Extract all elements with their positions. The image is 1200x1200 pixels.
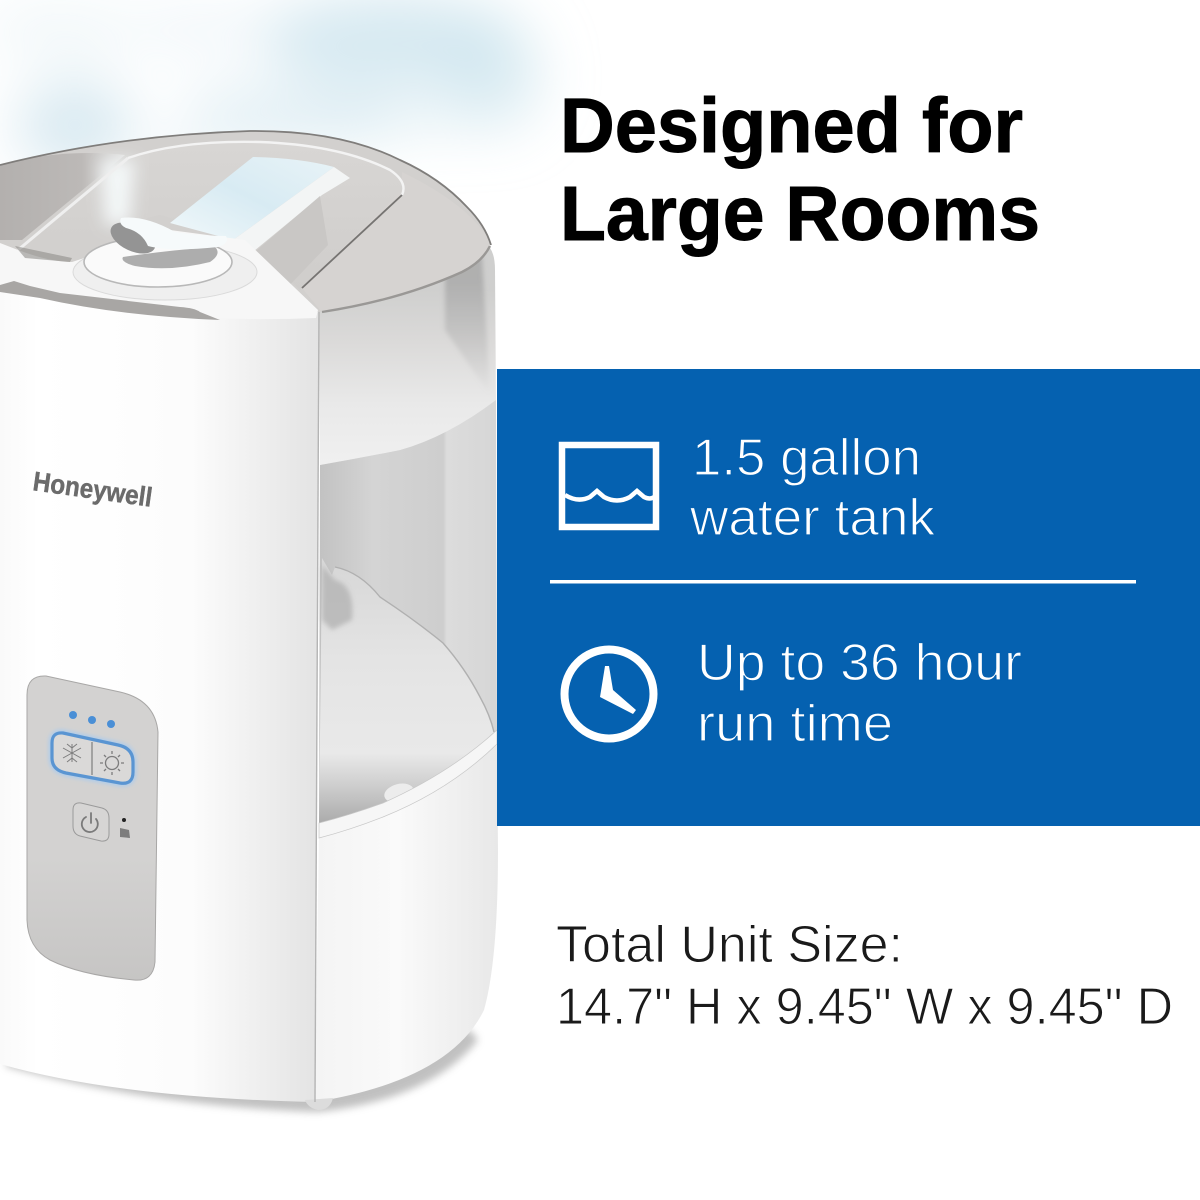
- tank reflection strip: [444, 258, 488, 373]
- feature text: water tank: [689, 429, 936, 547]
- nozzle collar: [84, 237, 232, 287]
- indicator dot: [122, 818, 126, 822]
- icon: refill: [120, 828, 130, 838]
- icon: snowflake: [63, 744, 81, 762]
- nozzle dial: [106, 216, 160, 260]
- white top deck: [0, 230, 318, 319]
- feature text: water tank: 1.5 gallon: [692, 429, 921, 487]
- base shell: [315, 735, 498, 1102]
- glass highlight: [128, 142, 404, 195]
- feature text: run time: run time: [697, 695, 893, 753]
- divider: [550, 580, 1136, 584]
- vent slot: [0, 281, 220, 320]
- base ledge: [319, 730, 497, 838]
- deck notch: [15, 246, 72, 262]
- inner bowl: [319, 558, 494, 823]
- feature text: water tank: water tank: [689, 489, 936, 547]
- button divider: [91, 742, 93, 775]
- title: Large Rooms: [560, 171, 1040, 257]
- blue panel background: [497, 369, 1200, 826]
- mode button outline: [52, 733, 133, 783]
- lid gray base: [0, 131, 491, 312]
- mist handle: [170, 157, 334, 240]
- status lights: [69, 711, 115, 728]
- icon: water tank: [562, 445, 656, 527]
- feature text: run time: Up to 36 hour: [697, 634, 1022, 692]
- right lid section: [302, 172, 491, 311]
- handle stem: [233, 167, 350, 256]
- unit size text: Total Unit Size:: [556, 916, 903, 974]
- float cap: [382, 781, 416, 805]
- lid left section: [0, 153, 125, 240]
- product: humidifier: [0, 131, 498, 1112]
- brand logo: Honeywell: [31, 466, 154, 513]
- title: Designed for: [560, 83, 1023, 169]
- lid inner window: [18, 142, 404, 290]
- nozzle slot: [122, 247, 218, 268]
- control panel: [27, 676, 158, 980]
- nozzle: [73, 216, 257, 300]
- tank post: [322, 565, 352, 630]
- handle shadow pane: [250, 196, 328, 290]
- water tank upper: [319, 248, 496, 465]
- title: [560, 83, 1040, 257]
- nozzle outer ring: [73, 244, 257, 300]
- button glow: [52, 733, 133, 783]
- panel plate: [27, 676, 158, 980]
- unit size text: 14.7" H x 9.45" W x 9.45" D: [556, 978, 1173, 1036]
- unit size text: [556, 916, 1173, 1036]
- humidifier front body: [0, 280, 319, 1102]
- foot: [305, 1098, 333, 1110]
- icon: clock: [564, 650, 654, 738]
- lid front edge: [322, 246, 490, 312]
- front seam: [315, 305, 319, 1102]
- water tank lower: [319, 400, 497, 823]
- icon: sun: [100, 751, 124, 775]
- nozzle cap: [120, 218, 227, 249]
- rim line: [0, 131, 491, 245]
- steam plume: [100, 160, 135, 225]
- floor shadow: [5, 1030, 478, 1112]
- bowl rim line: [335, 567, 494, 732]
- power button: [73, 803, 109, 841]
- feature text: run time: [697, 634, 1022, 753]
- panel: features: [497, 369, 1200, 826]
- mist cloud: [0, 0, 540, 250]
